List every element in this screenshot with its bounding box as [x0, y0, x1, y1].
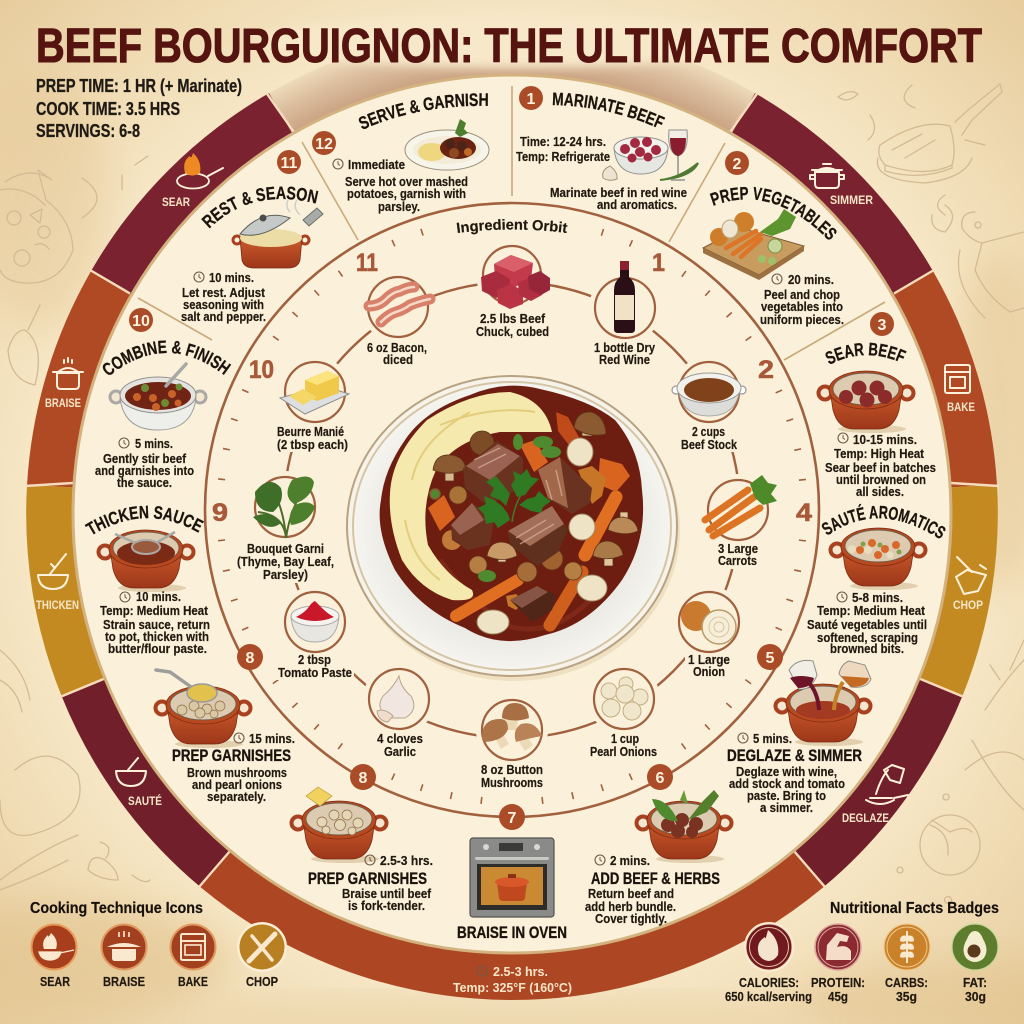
step 3: sear beef: 10-15 mins.: [853, 432, 917, 447]
pearl onions: [477, 438, 607, 634]
ingredient: beurre manie: [277, 362, 349, 452]
step 5: deglaze and simmer: add stock and tomato: [729, 776, 845, 791]
carrots: [456, 497, 616, 625]
step 10: combine and finish: the sauce.: [117, 475, 172, 490]
step 6: add beef and herbs: 2 mins.: [610, 853, 650, 868]
step 5: deglaze and simmer: paste. Bring to: [747, 788, 826, 803]
band label: thicken: [36, 554, 79, 612]
step 11: rest and season: 11: [281, 155, 298, 172]
ingredient: bouquet garni: [237, 476, 334, 582]
band: deglaze: [810, 688, 941, 869]
band label: braise: BRAISE: [45, 396, 81, 410]
step 6: add beef and herbs: 6: [656, 770, 665, 787]
step 7: braise in oven: Temp: 325°F (160°C): [453, 980, 572, 995]
step 10: combine and finish: Gently stir beef: [103, 451, 187, 466]
ingredient: beef stock: 2 cups: [692, 424, 725, 439]
ingredient: mushrooms: [481, 700, 543, 790]
step 8: prep garnishes (brown): [156, 644, 295, 804]
band label: saute: [116, 758, 162, 808]
step 11: rest and season: seasoning with: [183, 297, 264, 312]
band label: chop: [953, 557, 986, 612]
step 4: saute aromatics: browned bits.: [830, 641, 904, 656]
ingredient: onion: Onion: [693, 664, 725, 679]
ingredient: bacon: diced: [383, 352, 413, 367]
mushrooms: [429, 412, 638, 582]
band: braise in oven: [214, 869, 810, 977]
step 8: prep garnishes (braise): [292, 764, 433, 913]
nutritional facts badges panel: CALORIES:: [739, 975, 799, 990]
band: serve top fade: [280, 51, 744, 113]
step 11: rest and season: salt and pepper.: [181, 309, 266, 324]
inner cream disc: [73, 75, 951, 953]
orbit numbers: 1: [652, 249, 665, 277]
ingredient: carrots: [705, 475, 777, 568]
orbit numbers: 11: [356, 249, 378, 277]
section dividers: [138, 86, 885, 360]
orbit numbers: [212, 249, 812, 527]
cooking technique icons panel: BAKE: [178, 974, 208, 989]
ingredient: beurre manie: Beurre Manié: [277, 424, 344, 439]
step 3: sear beef: SEAR BEEF: [825, 342, 907, 364]
step 8: prep garnishes (braise): is fork-tender.: [348, 898, 425, 913]
band: bake: [913, 282, 974, 486]
band: saute: [83, 688, 214, 869]
nutritional facts badges panel: 650 kcal/serving: [725, 989, 812, 1004]
step 9: thicken sauce: Strain sauce, return: [103, 617, 210, 632]
cooking technique icons panel: BRAISE: [103, 974, 145, 989]
step 6: add beef and herbs: [585, 764, 732, 926]
recipe times: PREP TIME: 1 HR (+ Marinate): [36, 76, 242, 96]
nutritional facts badges panel: Nutritional Facts Badges: [830, 900, 999, 917]
step 1: marinate beef: Temp: Refrigerate: [516, 149, 610, 164]
step 9: thicken sauce: THICKEN SAUCE: [84, 506, 204, 534]
step 6: add beef and herbs: add herb bundle.: [585, 899, 676, 914]
ingredient: onion: 1 Large: [688, 652, 730, 667]
step 5: deglaze and simmer: Deglaze with wine,: [736, 764, 837, 779]
step 9: thicken sauce: Temp: Medium Heat: [100, 603, 209, 618]
ingredient: beurre manie: (2 tbsp each): [277, 437, 348, 452]
greens: [431, 434, 561, 582]
step 8: prep garnishes (brown): 15 mins.: [249, 731, 295, 746]
step 2: prep vegetables: vegetables into: [761, 299, 843, 314]
step 8: prep garnishes (braise): PREP GARNISHES: [308, 869, 427, 888]
step 4: saute aromatics: [807, 504, 946, 656]
icon: braise: [102, 924, 146, 970]
beef chunks: [451, 441, 592, 622]
step 10: combine and finish: COMBINE & FINISH: [102, 340, 232, 375]
step 4: saute aromatics: Sauté vegetables until: [807, 617, 927, 632]
step 11: rest and season: REST & SEASON: [201, 186, 318, 228]
ingredient: garlic: 4 cloves: [377, 731, 423, 746]
step 4: saute aromatics: Temp: Medium Heat: [817, 603, 926, 618]
recipe times: [36, 76, 242, 141]
nutritional facts badges panel: [725, 900, 999, 1004]
orbit numbers: 2: [758, 356, 774, 384]
ingredient: garlic: Garlic: [384, 744, 416, 759]
band label: deglaze: DEGLAZE: [842, 811, 889, 825]
recipe times: SERVINGS: 6-8: [36, 121, 140, 141]
step 11: rest and season: [181, 150, 324, 324]
step 9: thicken sauce: to pot, thicken with: [105, 629, 209, 644]
band label: saute: SAUTÉ: [128, 793, 162, 808]
ingredient: tomato paste: Tomato Paste: [278, 665, 352, 680]
ingredient: bacon: 6 oz Bacon,: [367, 340, 427, 355]
band label: braise: [45, 358, 83, 410]
band: chop: [941, 486, 975, 688]
step 8: prep garnishes (braise): 8: [359, 770, 368, 787]
step 8: prep garnishes (brown): and pearl onions: [192, 777, 282, 792]
badge: protein: [815, 924, 861, 970]
orbit numbers: 10: [249, 356, 274, 384]
central plate of beef bourguignon: [347, 376, 680, 681]
parsley garnish: [478, 469, 551, 528]
ingredient: onion: [679, 592, 739, 679]
step 2: prep vegetables: 2: [733, 156, 742, 173]
ingredient: tomato paste: 2 tbsp: [298, 652, 331, 667]
step 7: braise in oven: 7: [508, 810, 517, 827]
step 3: sear beef: Temp: High Heat: [834, 446, 925, 461]
ingredient: pearl onions: [590, 669, 657, 759]
step 12: serve and garnish: [312, 93, 490, 214]
heading: ingredient orbit: Ingredient Orbit: [456, 219, 568, 234]
step 9: thicken sauce: [84, 506, 210, 656]
step 9: thicken sauce: butter/flour paste.: [108, 641, 207, 656]
step 2: prep vegetables: PREP VEGETABLES: [710, 186, 837, 240]
cooking technique icons panel: CHOP: [246, 974, 278, 989]
step 1: marinate beef: [516, 86, 699, 212]
ingredient: carrots: 3 Large: [718, 541, 758, 556]
ingredient: garlic: [369, 669, 429, 759]
cooking technique icons panel: [30, 900, 287, 989]
step 12: serve and garnish: Immediate: [348, 157, 405, 172]
band: braise: [50, 282, 111, 486]
band: simmer: [744, 113, 913, 282]
ingredient: beef stock: [672, 362, 746, 452]
step 7: braise in oven: BRAISE IN OVEN: [457, 923, 567, 942]
nutritional facts badges panel: PROTEIN:: [811, 975, 865, 990]
ingredient: beef chuck: Chuck, cubed: [476, 324, 549, 339]
step 4: saute aromatics: 5-8 mins.: [852, 590, 903, 605]
ingredient: bouquet garni: (Thyme, Bay Leaf,: [237, 554, 334, 569]
step 3: sear beef: all sides.: [856, 484, 904, 499]
band: sear: [111, 113, 280, 282]
step 6: add beef and herbs: Return beef and: [588, 886, 674, 901]
ingredient: pearl onions: Pearl Onions: [590, 744, 657, 759]
ingredient: bacon: [367, 277, 430, 367]
step 5: deglaze and simmer: DEGLAZE & SIMMER: [727, 746, 862, 765]
step 7: braise in oven: 2.5-3 hrs.: [493, 964, 548, 979]
step 8: prep garnishes (brown): PREP GARNISHES: [172, 746, 291, 765]
nutritional facts badges panel: CARBS:: [885, 975, 928, 990]
step 11: rest and season: 10 mins.: [209, 270, 254, 285]
step 6: add beef and herbs: Cover tightly.: [595, 911, 667, 926]
ingredient: bouquet garni: Bouquet Garni: [247, 541, 324, 556]
step 2: prep vegetables: 20 mins.: [788, 272, 834, 287]
step 12: serve and garnish: SERVE & GARNISH: [358, 93, 488, 129]
band label: sear: SEAR: [162, 195, 190, 209]
step 8: prep garnishes (braise): Braise until beef: [342, 886, 432, 901]
step 5: deglaze and simmer: 5 mins.: [753, 731, 792, 746]
step 3: sear beef: until browned on: [836, 472, 926, 487]
ingredient: red wine: [594, 261, 656, 367]
ingredient: red wine: Red Wine: [599, 352, 650, 367]
ingredient: beef stock: Beef Stock: [681, 437, 738, 452]
ingredient: bouquet garni: Parsley): [263, 567, 308, 582]
step 11: rest and season: Let rest. Adjust: [182, 285, 266, 300]
cooking technique icons panel: SEAR: [40, 974, 71, 989]
icon: chop: [237, 922, 287, 972]
ingredient: mushrooms: Mushrooms: [481, 775, 543, 790]
band label: deglaze: [842, 765, 908, 825]
badge: fat: [952, 924, 998, 970]
step 10: combine and finish: 10: [132, 313, 150, 330]
nutritional facts badges panel: FAT:: [963, 975, 987, 990]
step 8: prep garnishes (braise): 2.5-3 hrs.: [380, 853, 433, 868]
step 3: sear beef: [816, 312, 936, 499]
band label: bake: BAKE: [947, 400, 975, 414]
step 12: serve and garnish: parsley.: [378, 199, 420, 214]
recipe times: COOK TIME: 3.5 HRS: [36, 99, 180, 119]
step 9: thicken sauce: 10 mins.: [136, 589, 181, 604]
nutritional facts badges panel: 35g: [896, 989, 917, 1004]
step 1: marinate beef: Marinate beef in red wine: [550, 185, 687, 200]
step 1: marinate beef: and aromatics.: [597, 197, 677, 212]
step 6: add beef and herbs: ADD BEEF & HERBS: [591, 869, 720, 888]
ingredient: beef chuck: [476, 246, 550, 339]
band label: bake: [945, 365, 975, 414]
band label: thicken: THICKEN: [36, 598, 79, 612]
step 10: combine and finish: 5 mins.: [135, 436, 173, 451]
step 5: deglaze and simmer: [727, 644, 871, 815]
step 1: marinate beef: 1: [527, 91, 536, 108]
step 5: deglaze and simmer: a simmer.: [760, 800, 813, 815]
step 8: prep garnishes (brown): 8: [246, 650, 255, 667]
step 3: sear beef: 3: [878, 317, 887, 334]
step 4: saute aromatics: softened, scraping: [817, 630, 918, 645]
nutritional facts badges panel: 30g: [965, 989, 986, 1004]
step 10: combine and finish: and garnishes into: [95, 463, 194, 478]
orbit numbers: 9: [212, 499, 228, 527]
step 2: prep vegetables: [702, 151, 844, 327]
step 2: prep vegetables: uniform pieces.: [760, 312, 844, 327]
step 7: braise in oven: [453, 804, 572, 995]
ingredient: tomato paste: [278, 592, 352, 680]
step 12: serve and garnish: 12: [315, 136, 333, 153]
step 12: serve and garnish: potatoes, garnish with: [347, 186, 466, 201]
step 8: prep garnishes (brown): Brown mushrooms: [187, 765, 287, 780]
ingredient: beef chuck: 2.5 lbs Beef: [480, 311, 546, 326]
band label: simmer: [810, 164, 873, 207]
band label: simmer: SIMMER: [830, 193, 873, 207]
icon: bake: [170, 924, 216, 970]
orbit numbers: 4: [796, 499, 812, 527]
step 1: marinate beef: Time: 12-24 hrs.: [520, 134, 606, 149]
step 5: deglaze and simmer: 5: [766, 650, 775, 667]
step 10: combine and finish: [95, 308, 232, 490]
step 8: prep garnishes (brown): separately.: [207, 789, 266, 804]
mashed potatoes: [390, 392, 552, 600]
band label: chop: CHOP: [953, 598, 983, 612]
step 2: prep vegetables: Peel and chop: [764, 287, 840, 302]
badge: calories: [744, 922, 794, 972]
nutritional facts badges panel: 45g: [828, 989, 848, 1004]
step 3: sear beef: Sear beef in batches: [825, 460, 936, 475]
ingredient orbit: [205, 203, 819, 817]
band label: sear: [162, 153, 223, 209]
icon: sear: [32, 924, 76, 970]
ingredient: pearl onions: 1 cup: [611, 731, 639, 746]
ingredient: red wine: 1 bottle Dry: [594, 340, 656, 355]
cooking technique icons panel: Cooking Technique Icons: [30, 900, 203, 917]
step 1: marinate beef: MARINATE BEEF: [552, 92, 666, 128]
ingredient: carrots: Carrots: [718, 553, 757, 568]
step 4: saute aromatics: SAUTÉ AROMATICS: [822, 504, 946, 538]
band: thicken: [49, 486, 83, 688]
step 12: serve and garnish: Serve hot over mashed: [345, 174, 468, 189]
sauce: [380, 386, 643, 641]
ingredient: mushrooms: 8 oz Button: [481, 762, 543, 777]
badge: carbs: [884, 924, 930, 970]
